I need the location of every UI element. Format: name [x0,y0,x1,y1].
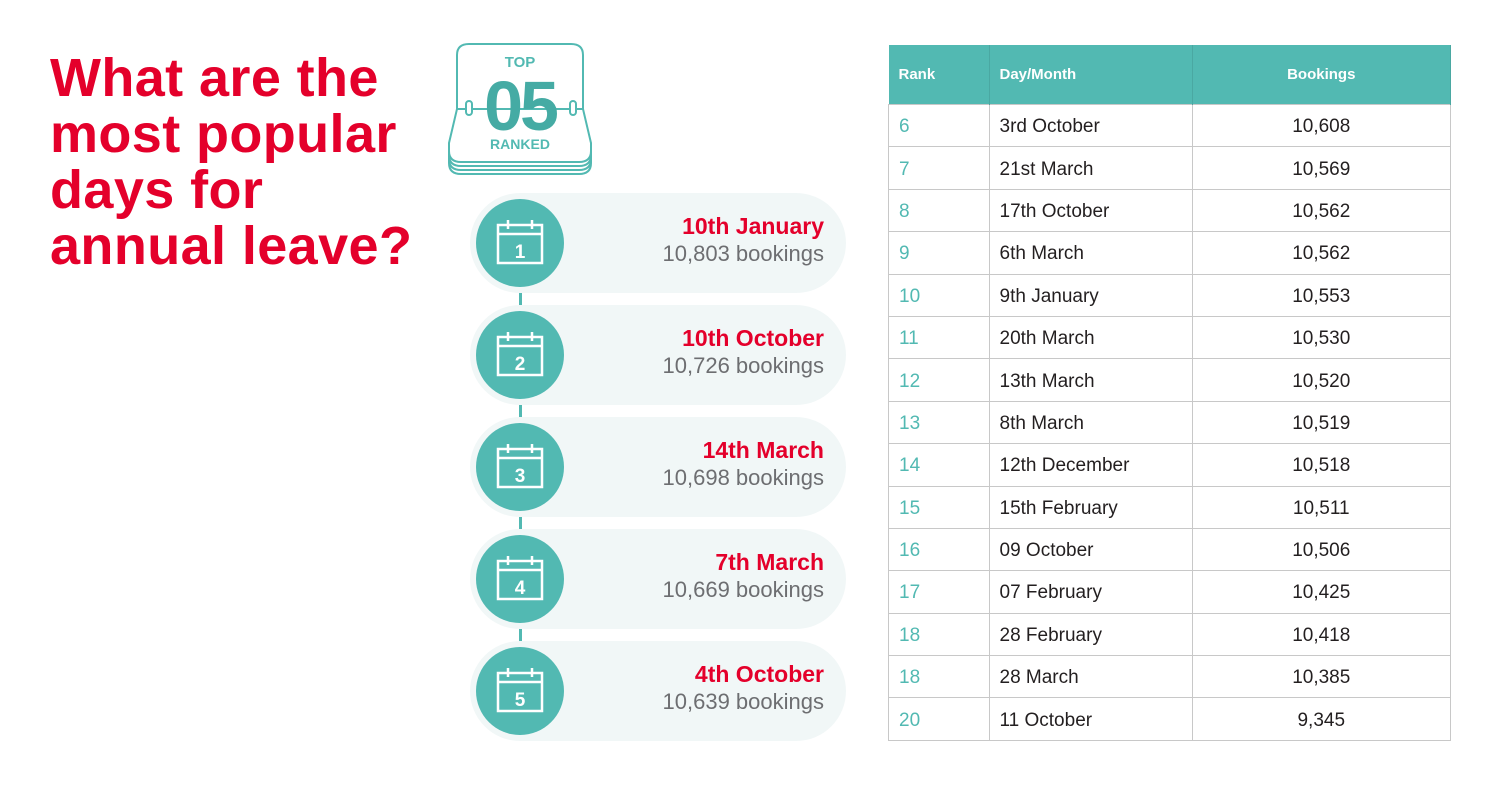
table: ranks 6-20: 9 [899,243,910,264]
table: ranks 6-20: 15th February [1000,498,1118,519]
table: ranks 6-20: 10,520 [1292,371,1350,392]
table: ranks 6-20: 17th October [1000,201,1109,222]
table: ranks 6-20: 13th March [1000,371,1095,392]
table: ranks 6-20: 18 [899,625,920,646]
pill: rank 3: 3 [515,466,525,487]
title [50,48,412,276]
table: ranks 6-20: Day/Month [1000,66,1076,83]
icon: top 05 ranked calendar [448,43,592,175]
pill: rank 4 [470,529,846,629]
icon: top 05 ranked calendar: RANKED [490,136,550,152]
table: ranks 6-20: 9,345 [1297,710,1345,731]
table: ranks 6-20: 13 [899,413,920,434]
title: What are the [50,48,379,108]
table: ranks 6-20: 10 [899,286,920,307]
table: ranks 6-20: 20th March [1000,328,1095,349]
pill: rank 2 [470,305,846,405]
title: most popular [50,104,397,164]
pill: rank 1 [470,193,846,293]
table: ranks 6-20: 07 February [1000,582,1102,603]
pill: rank 3: 14th March [703,437,824,463]
table: ranks 6-20: 09 October [1000,540,1094,561]
table: ranks 6-20: 10,553 [1292,286,1350,307]
table: ranks 6-20: 10,418 [1292,625,1350,646]
pill: rank 2: 10,726 bookings [663,353,824,378]
table: ranks 6-20: 8th March [1000,413,1084,434]
table: ranks 6-20: 17 [899,582,920,603]
pill: rank 1: 1 [515,242,526,263]
title: annual leave? [50,216,412,276]
table: ranks 6-20: Bookings [1287,66,1355,83]
table: ranks 6-20: 28 March [1000,667,1079,688]
table: ranks 6-20: 11 October [1000,710,1092,731]
table: ranks 6-20: 7 [899,159,910,180]
table: ranks 6-20: 16 [899,540,920,561]
table: ranks 6-20: 6th March [1000,243,1084,264]
pill: rank 2: 10th October [682,325,824,351]
pill: rank 4: 7th March [715,549,824,575]
table: ranks 6-20: 10,562 [1292,243,1350,264]
table: ranks 6-20: 10,569 [1292,159,1350,180]
title: days for [50,160,263,220]
pill: rank 5: 10,639 bookings [663,689,824,714]
table: ranks 6-20: 10,608 [1292,116,1350,137]
table: ranks 6-20: 9th January [1000,286,1099,307]
table: ranks 6-20: 18 [899,667,920,688]
pill: rank 2: 2 [515,354,525,375]
table: ranks 6-20: 10,562 [1292,201,1350,222]
table: ranks 6-20 [888,45,1451,741]
table: ranks 6-20: 14 [899,455,920,476]
pill: rank 4: 10,669 bookings [663,577,824,602]
table: ranks 6-20: 20 [899,710,920,731]
icon: top 05 ranked calendar: 05 [484,67,557,145]
table: ranks 6-20: 10,385 [1292,667,1350,688]
table: ranks 6-20: 3rd October [1000,116,1100,137]
table: ranks 6-20: 10,506 [1292,540,1350,561]
table: ranks 6-20: 11 [899,328,919,349]
table: ranks 6-20: 10,518 [1292,455,1350,476]
table: ranks 6-20: 10,511 [1293,498,1350,519]
table: ranks 6-20: 15 [899,498,920,519]
pill: rank 5 [470,641,846,741]
table: ranks 6-20: 10,519 [1292,413,1350,434]
table: ranks 6-20: Rank [898,66,935,83]
pill: rank 5: 4th October [695,661,824,687]
table: ranks 6-20: 12 [899,371,920,392]
pill: rank 5: 5 [515,690,526,711]
table: ranks 6-20: 10,530 [1292,328,1350,349]
table: ranks 6-20: 10,425 [1292,582,1350,603]
pill: rank 3: 10,698 bookings [663,465,824,490]
pill: rank 3 [470,417,846,517]
table: ranks 6-20: 28 February [1000,625,1102,646]
icon: top 05 ranked calendar: TOP [505,54,535,71]
pill: rank 4: 4 [515,578,526,599]
table: ranks 6-20: 21st March [1000,159,1093,180]
pill: rank 1: 10th January [682,213,824,239]
table: ranks 6-20: 6 [899,116,910,137]
table: ranks 6-20: 8 [899,201,910,222]
table: ranks 6-20: 12th December [1000,455,1129,476]
pill: rank 1: 10,803 bookings [663,241,824,266]
